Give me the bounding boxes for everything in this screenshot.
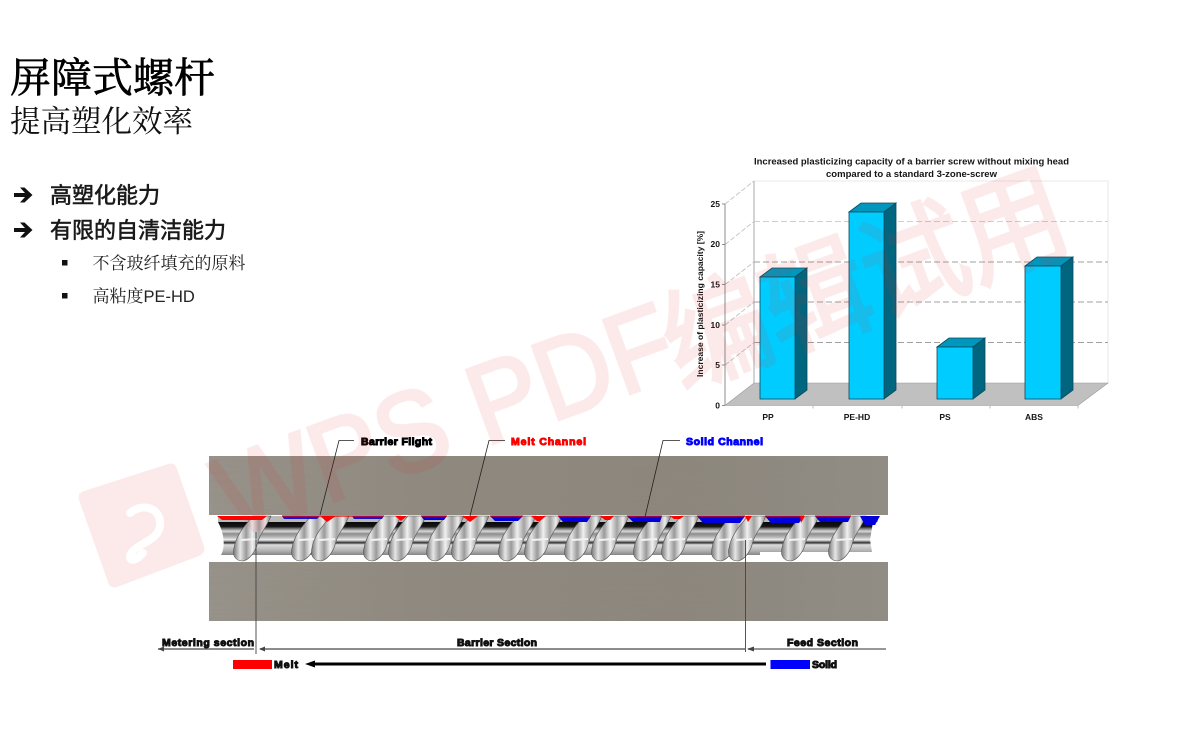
barrel top [209,456,888,515]
icon: arrow bullet 1 [14,188,32,202]
watermark text: 编辑试用 [646,149,1084,412]
x-axis labels [762,412,1043,422]
bar chart: plasticizing capacity [696,156,1108,422]
y-axis labels [711,199,720,410]
chart floor [725,383,1108,406]
chart title: compared to a standard 3-zone-screw [826,169,998,179]
barrier section arrow and label [259,637,745,652]
watermark [79,137,1084,587]
bullet: high plasticizing capacity: 高塑化能力 [50,183,160,208]
screw body [218,522,873,555]
y-axis labels: 15 [711,280,720,290]
melt and solid channels [217,516,880,525]
y-axis labels: 0 [715,400,720,410]
x-axis labels: PS [939,412,951,422]
callout: barrier flight [320,436,432,515]
title: 屏障式螺杆 [10,55,215,101]
barrier screw diagram [158,436,888,671]
barrier section arrow and label: Barrier Section [457,637,537,649]
y-axis labels: 5 [715,360,720,370]
y-axis title: Increase of plasticizing capacity [%] [696,231,705,377]
sub-bullet: high viscosity PE-HD: 高粘度PE-HD [92,287,195,306]
bar: PE-HD [849,203,896,399]
callout: solid channel [645,436,763,517]
watermark text: WPS PDF [198,279,691,561]
watermark logo [79,464,204,587]
screw flights [233,516,866,561]
chart frame and gridlines [722,181,1108,406]
feed section arrow and label [747,637,886,652]
heading block [10,55,215,139]
feed section arrow and label: Feed Section [787,637,858,649]
bullet list [14,183,246,306]
callout: melt channel: Melt Channel [511,436,586,448]
legend: solid [770,659,837,671]
sub-bullet: no glass fibre: 不含玻纤填充的原料 [92,254,246,273]
bullet: limited self-cleaning: 有限的自清洁能力 [50,218,226,243]
icon: arrow bullet 2 [14,222,32,238]
y-axis labels: 20 [711,239,720,249]
bar: PS [937,338,985,399]
x-axis labels: ABS [1025,412,1043,422]
callout: melt channel [470,436,586,516]
watermark logo glyph [130,507,160,560]
x-axis line [725,406,1078,408]
bar: ABS [1025,257,1073,399]
subtitle: 提高塑化效率 [10,105,193,139]
callout: barrier flight: Barrier Flight [361,436,432,448]
metering section arrow and label: Metering section [162,637,254,649]
chart title: Increased plasticizing capacity of a barrier screw without mixing head [754,156,1069,166]
y-axis labels: 10 [711,320,720,330]
callout: solid channel: Solid Channel [686,436,763,448]
section boundary lines [256,532,746,654]
legend: solid: Solid [812,659,837,671]
sub-bullet marker 2 [62,293,68,298]
sub-bullet marker 1 [62,260,68,266]
arrow: solid to melt direction [305,660,766,668]
chart title [754,156,1069,179]
x-axis labels: PE-HD [844,412,870,422]
screw crest strip [218,516,878,522]
y-axis labels: 25 [711,199,720,209]
barrel bottom [209,562,888,621]
legend: melt [233,659,298,671]
bar: PP [760,268,807,399]
legend: melt: Melt [274,659,298,671]
x-axis labels: PP [762,412,774,422]
